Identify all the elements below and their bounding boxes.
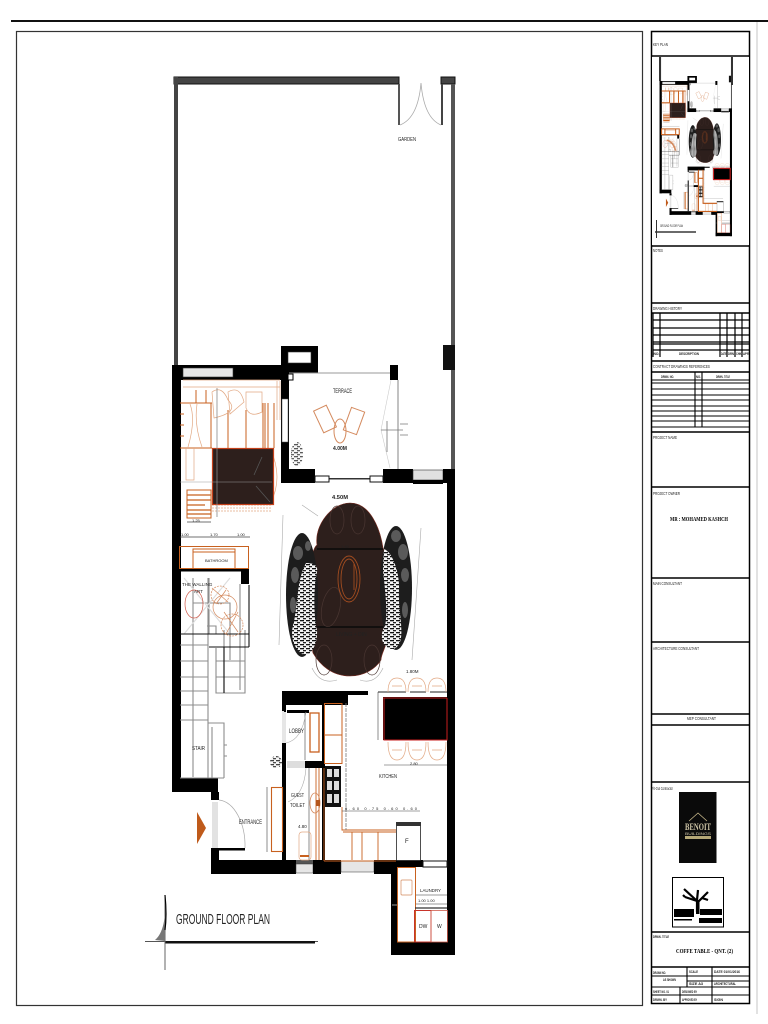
floor plan labels: 4.80 (298, 824, 307, 829)
architecture consultant: ARCHITECTURE CONSULTANT (653, 646, 699, 651)
drawing data table: DRWN. BY (653, 998, 667, 1002)
drawing data table: SHEET NO. 01 (653, 990, 669, 994)
drawing frame (16, 32, 642, 1006)
drawing history table: NO. (654, 352, 660, 356)
project owner (653, 491, 728, 523)
drawing history table: CHK (736, 352, 742, 356)
drawing history table: DESCRIPTION (679, 352, 699, 356)
project owner: PROJECT OWNER (653, 491, 681, 496)
drawing data table: ARCHITECTURAL (714, 982, 736, 986)
right edge strip (756, 22, 758, 1014)
drawing title (653, 934, 733, 955)
floor plan labels: F (405, 839, 409, 845)
floor plan labels: THE WALLING (182, 582, 213, 587)
drawing data table: DATE 01/01/2016 (714, 970, 740, 974)
ground floor plan title (145, 895, 318, 970)
kitchen (267, 678, 448, 861)
floor plan labels: LOBBY (289, 729, 304, 735)
drawing data table: DESIGNED BY (682, 990, 697, 994)
drawing history table: DRN (728, 352, 734, 356)
floor plan (172, 77, 455, 955)
wardrobe (180, 546, 249, 584)
floor plan labels: 2.80 (410, 761, 419, 766)
page top rule (11, 20, 768, 22)
garden walls (174, 77, 455, 470)
drawing data table: AS SHOWN (663, 978, 676, 982)
main consultant: MAIN CONSULTANT (653, 581, 682, 586)
floor plan labels: 0.60 0.75 0.60 0.60 (345, 806, 418, 811)
floor plan labels: 1.70 (210, 532, 219, 537)
contract drawings references table (651, 364, 750, 427)
drawing title: COFFE TABLE - QNT. (2) (676, 948, 733, 955)
floor plan labels: 1.80M (406, 669, 419, 674)
fit-out contractor: Fit-Out Contractor (652, 786, 673, 791)
laundry room (392, 868, 448, 942)
logo: benoit: BENOIT (685, 822, 711, 832)
drawing history table: DATE (721, 352, 727, 356)
floor plan labels: GUEST (291, 793, 304, 799)
drawing data table: SCALE (689, 970, 698, 974)
floor plan labels: 4.00M (333, 446, 347, 452)
floor plan labels: KITCHEN (379, 774, 397, 780)
drawing data table (651, 967, 750, 1003)
floor plan labels: BATHROOM (205, 558, 228, 563)
floor plan labels: GARDEN (398, 137, 416, 143)
key plan: GROUND FLOOR PLAN (660, 224, 683, 228)
floor plan labels: 1.00 1.00 (418, 898, 435, 903)
bedroom (180, 380, 280, 537)
drawing data table: SIGN (714, 998, 723, 1002)
main walls (172, 365, 455, 955)
floor plan labels: LIVING + DIN (336, 632, 367, 638)
floor plan labels: 4.50M (332, 495, 348, 501)
notes: NOTES (653, 248, 663, 253)
floor plan labels: STAIR (192, 746, 205, 752)
floor plan labels: 1.40 (341, 544, 350, 549)
floor plan labels (181, 137, 442, 930)
title block (651, 5, 750, 1004)
floor plan labels: 1.25 (192, 518, 201, 523)
mep consultant: MEP CONSULTANT (687, 716, 716, 721)
logo: benoit (679, 792, 716, 863)
floor plan labels: LAUNDRY (420, 888, 441, 893)
contract drawings references table: DRWN. TITLE (716, 375, 730, 379)
drawing data table: APPROVED BY (682, 998, 697, 1002)
stairs and bath (180, 578, 249, 778)
key plan: KEY PLAN (653, 42, 668, 47)
title block frame (652, 32, 750, 1004)
project owner: MR : MOHAMED KASHCH (670, 517, 728, 523)
drawing title: DRWN. TITLE (653, 934, 669, 939)
logo: tree (672, 878, 724, 927)
floor plan labels: TERRACE (333, 389, 352, 395)
floor plan labels: W (437, 924, 442, 930)
ground floor plan title: GROUND FLOOR PLAN (176, 911, 270, 928)
drawing history table: APR (743, 352, 749, 356)
floor plan labels: ENTRANCE (239, 820, 262, 826)
floor plan labels: TOILET (290, 803, 305, 809)
floor plan labels: 1.00 (181, 532, 190, 537)
floor plan labels: 1.00 (237, 532, 246, 537)
terrace box (281, 346, 408, 469)
section dividers (651, 56, 750, 967)
entrance and lobby (197, 709, 306, 852)
project name: PROJECT NAME (653, 435, 677, 440)
contract drawings references table: DRWN. NO. (661, 375, 674, 379)
drawing history table (653, 306, 750, 357)
living room table (279, 503, 421, 681)
drawing history table: DRAWING HISTORY (653, 306, 682, 311)
drawing data table: DRAWN NO. (653, 971, 666, 975)
logo: benoit: BUILDINGS (685, 831, 711, 836)
key plan (652, 43, 749, 245)
drawing data table: SIZE A3 (689, 982, 703, 986)
floor plan labels: DW (419, 924, 428, 930)
floor plan labels: ART (194, 589, 203, 594)
contract drawings references table: CONTRACT DRAWINGS REFERENCES (653, 364, 710, 369)
contract drawings references table: NO. (696, 375, 701, 379)
